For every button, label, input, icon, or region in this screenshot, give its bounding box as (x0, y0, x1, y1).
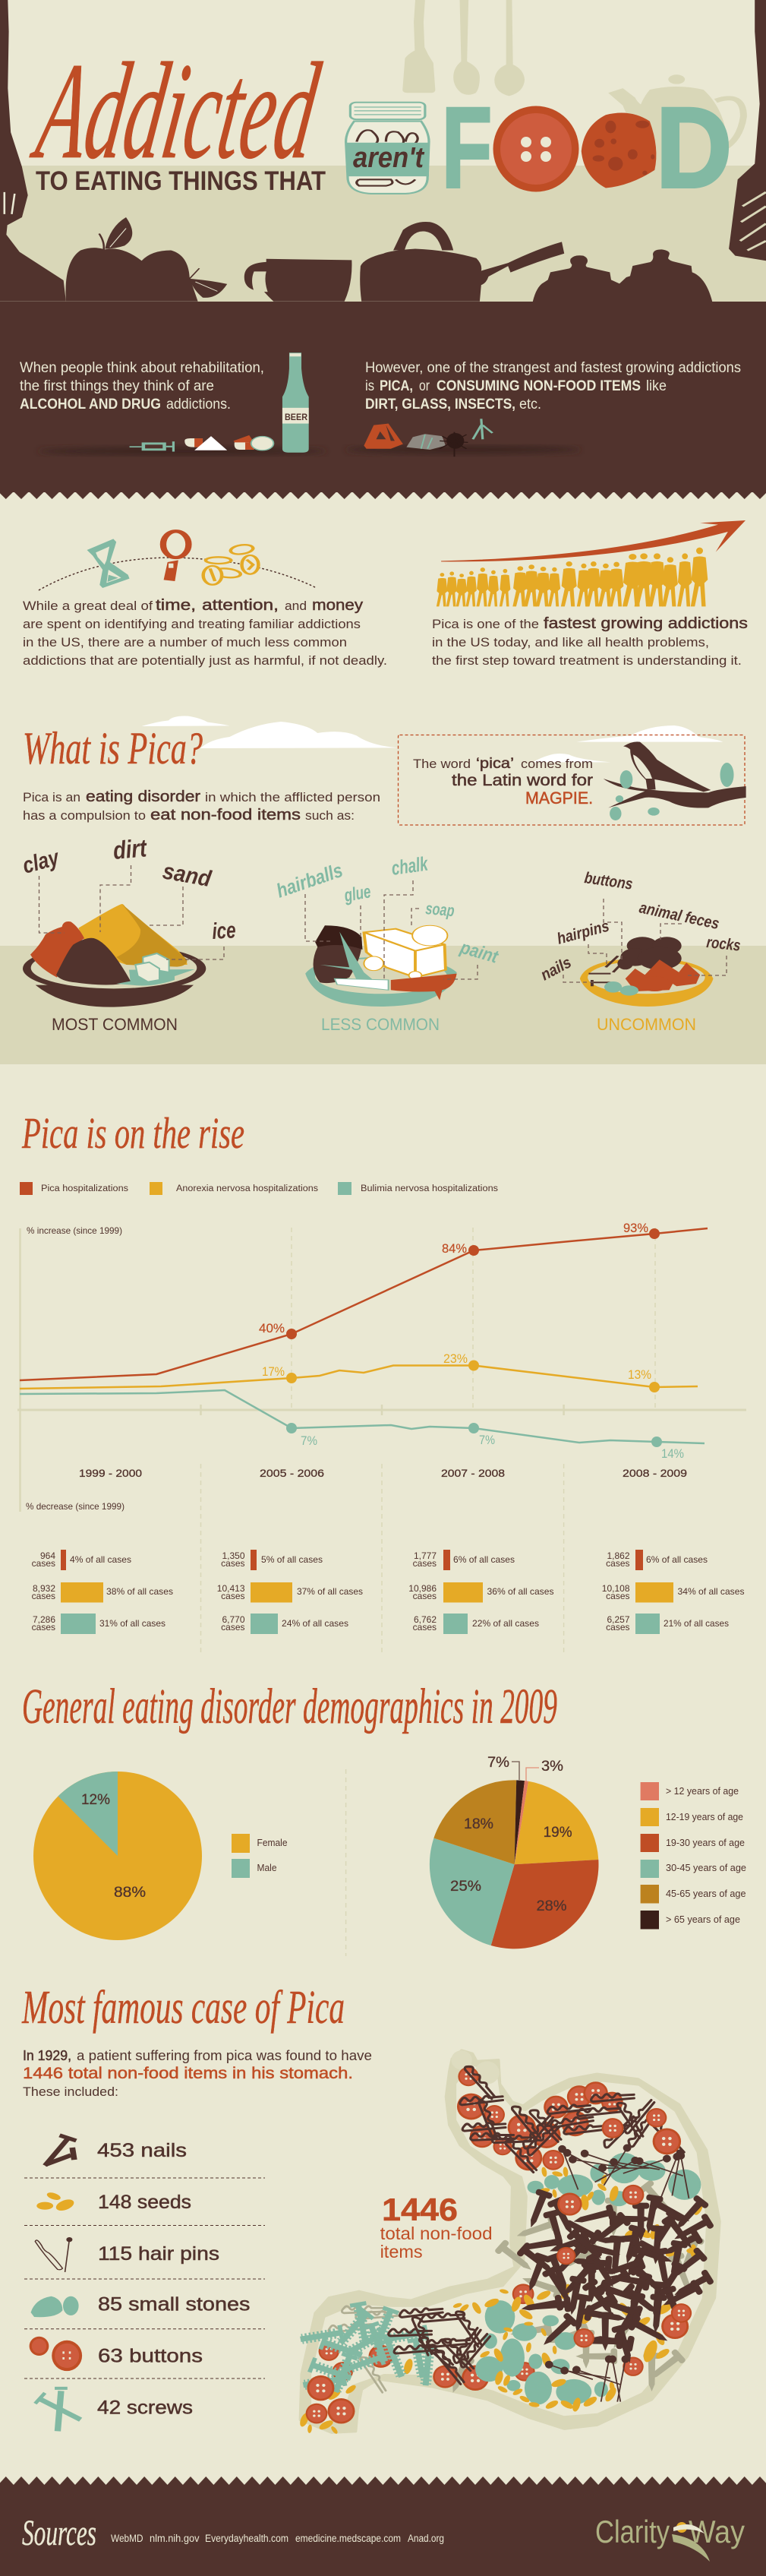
text: fastest growing (432, 615, 748, 668)
series: pica (20, 1221, 708, 1380)
text: however pica: DIRT, GLASS, INSECTS, (365, 397, 515, 412)
legend: gender: Male (257, 1863, 277, 1873)
list: items: 115 hair pins (98, 2243, 219, 2265)
clouds (142, 716, 723, 762)
series: pica: 84% (442, 1241, 467, 1256)
text: however pica: or (419, 378, 430, 394)
clay (30, 921, 84, 978)
text: fastest growing: Pica is one of the (432, 617, 539, 631)
pie chart: age: 3% (541, 1759, 563, 1775)
text: however pica (365, 360, 741, 412)
labels: uncommon (538, 869, 742, 984)
letter D: D (656, 84, 732, 211)
sand label: sand (161, 858, 213, 892)
text: case intro: a patient suffering from pica was found to have (77, 2048, 372, 2063)
legend (20, 1182, 498, 1195)
list: items: 85 small stones (98, 2294, 251, 2315)
category captions: LESS COMMON (321, 1015, 440, 1034)
callout text: The word (413, 757, 471, 771)
glue label: glue (342, 881, 373, 906)
panel: demographics (22, 1679, 746, 1956)
series: anorexia: 13% (628, 1367, 651, 1382)
heading: What is Pica? (23, 723, 203, 773)
list: items: 42 screws (97, 2397, 193, 2419)
sugar bowls (533, 249, 712, 302)
line chart (17, 1221, 746, 1656)
legend: Pica hospitalizations (41, 1184, 128, 1193)
plate inside (588, 961, 705, 994)
paint (391, 974, 457, 1000)
bars: 2005-2006: 37% of all cases (297, 1586, 363, 1597)
bars: 2008-2009: 10,108 (602, 1583, 630, 1594)
dotted arc (39, 558, 317, 590)
rocks (626, 959, 700, 991)
icon: drugs and beer bottle (130, 352, 309, 453)
pie chart: age: 19% (544, 1825, 572, 1841)
leader lines (39, 865, 224, 959)
bars: 2005-2006 (217, 1550, 363, 1634)
series: pica: 40% (259, 1321, 285, 1335)
period labels: 2007 - 2008 (441, 1467, 505, 1479)
heading: Pica is on the rise (21, 1108, 244, 1158)
top buttons (542, 2108, 692, 2347)
stomach illustration (298, 2050, 720, 2435)
soap label: soap (425, 899, 456, 920)
text: case intro (23, 2048, 372, 2099)
faded items (328, 2050, 705, 2395)
icon: nails (45, 2135, 76, 2166)
sand (78, 904, 188, 965)
text: however pica: like (646, 378, 667, 394)
sources list (111, 2533, 444, 2544)
series: bulimia (20, 1390, 705, 1461)
text: rehabilitation: the first things they think of are (20, 378, 214, 394)
pie chart: age: 28% (536, 1898, 567, 1914)
bars: 2005-2006: 24% of all cases (282, 1618, 348, 1629)
text: fastest growing: in the US today, and like all health problems, (432, 635, 709, 650)
text: however pica: However, one of the strangest and fastest growing addictions (365, 360, 741, 376)
sources heading: Sources (22, 2513, 96, 2553)
bars: 1999-2000: 8,932 (33, 1583, 55, 1594)
legend: age: 19-30 years of age (666, 1838, 745, 1848)
text: however pica: etc. (519, 397, 541, 412)
icon: hair pins (35, 2238, 72, 2272)
bars: 2005-2006: 1,350 (222, 1550, 245, 1561)
sources list: emedicine.medscape.com (295, 2533, 401, 2544)
bars: 2005-2006: cases (221, 1558, 244, 1569)
plate inside (31, 947, 197, 988)
icon: hourglass (87, 539, 130, 588)
pie chart: gender: 12% (81, 1792, 110, 1808)
legend: age: > 12 years of age (666, 1786, 739, 1797)
table band (0, 946, 766, 1064)
callout: magpie (398, 735, 746, 825)
category captions (52, 1015, 696, 1034)
stones (604, 981, 638, 996)
bars: 2007-2008: 10,986 (408, 1583, 437, 1594)
divider (345, 1769, 347, 1956)
series: bulimia: 7% (301, 1433, 317, 1448)
screws (299, 2303, 437, 2394)
seeds (298, 2167, 705, 2435)
leader lines (563, 899, 727, 982)
category captions: UNCOMMON (597, 1015, 696, 1034)
legend: gender (232, 1834, 288, 1878)
bars: 1999-2000: 38% of all cases (106, 1586, 173, 1597)
feces (617, 937, 682, 970)
bars: 1999-2000: 7,286 (33, 1614, 55, 1625)
rocks label: rocks (705, 934, 742, 955)
hairpins label: hairpins (555, 917, 611, 948)
title: Addicted: Addicted (24, 34, 328, 188)
panel: intro on brown (0, 302, 766, 499)
panel: most famous case (21, 1982, 720, 2435)
icon: seeds (36, 2191, 77, 2213)
text: case intro: In 1929, (23, 2048, 71, 2063)
bars: 2008-2009: cases (606, 1622, 630, 1633)
plate rim (23, 944, 206, 1007)
callout: 1446 total: total non-food (380, 2224, 493, 2243)
legend: gender: Female (257, 1838, 288, 1848)
zigzag edge (0, 2476, 766, 2485)
beer label: BEER (285, 412, 307, 422)
text: fastest growing: fastest growing addictions (544, 615, 748, 632)
bars: 2005-2006: 6,770 (222, 1614, 245, 1625)
icon: magnifier (163, 531, 188, 581)
text: time attention money: and (285, 599, 307, 613)
bars: 2007-2008: cases (413, 1558, 437, 1569)
bars: 2007-2008: cases (413, 1591, 437, 1601)
panel: what is pica (0, 716, 766, 1064)
callout text (413, 756, 593, 808)
chalk label: chalk (390, 852, 430, 880)
legend: age: 45-65 years of age (666, 1889, 746, 1899)
callout text: the Latin word for (452, 772, 593, 789)
sources list: Anad.org (408, 2533, 444, 2544)
paint label: paint (458, 937, 501, 968)
ice label: ice (212, 918, 236, 944)
text: case intro: These included: (23, 2085, 118, 2099)
icons: list (30, 2135, 82, 2431)
bars: 1999-2000: cases (32, 1591, 55, 1601)
series: anorexia: 17% (262, 1364, 285, 1379)
left and right spatula silhouettes (0, 0, 766, 302)
dirt label: dirt (112, 833, 149, 864)
icon: jar with aren't label (346, 103, 429, 194)
icon: coins (203, 543, 258, 585)
text: however pica: PICA, (380, 378, 413, 394)
list: items: 453 nails (97, 2140, 187, 2161)
list: items (24, 2140, 265, 2419)
zigzag edge (0, 491, 766, 499)
plate: less common (305, 925, 457, 1007)
text: definition: in which the afflicted person (205, 790, 380, 804)
bars: 2007-2008: cases (413, 1622, 437, 1633)
arrow: rising (441, 520, 746, 561)
bars: 2005-2006: cases (221, 1622, 244, 1633)
icon: crowd silhouette (437, 548, 708, 606)
text: definition: has a compulsion to (23, 808, 146, 823)
dashed box (398, 735, 745, 825)
glue (320, 932, 376, 982)
clay label: clay (20, 845, 62, 879)
panel: pica is on the rise (17, 1108, 746, 1656)
legend: Bulimia nervosa hospitalizations (361, 1184, 498, 1193)
bars: 2007-2008: 6,762 (414, 1614, 437, 1625)
nails (516, 2189, 714, 2365)
callout text: comes from (521, 757, 593, 771)
ball pins (544, 2143, 693, 2402)
panel: header kitchen scene (0, 0, 766, 302)
sand shadow (116, 904, 188, 967)
text: rehabilitation: ALCOHOL AND DRUG (20, 397, 161, 412)
text: definition: such as: (305, 808, 355, 823)
text: case intro: 1446 total non-food items in his stomach. (23, 2065, 353, 2082)
bars: 2007-2008: 36% of all cases (487, 1586, 554, 1597)
period labels: 2008 - 2009 (623, 1467, 687, 1479)
callout: 1446 total: 1446 (382, 2192, 458, 2227)
stomach outline (300, 2050, 720, 2432)
sources list: Everydayhealth.com (205, 2533, 288, 2544)
water (116, 969, 195, 985)
text: however pica: is (365, 378, 374, 394)
foam (364, 925, 447, 979)
icon: jar with aren't label: aren't (353, 142, 424, 174)
buttons (319, 2067, 644, 2391)
series: anorexia: 23% (443, 1351, 468, 1366)
series: pica: 93% (623, 1221, 648, 1235)
icon: screws (35, 2388, 80, 2431)
text: time attention money: money (312, 597, 363, 614)
icon: rock, glass, spider, dragonfly (364, 419, 493, 457)
icon: magpie on branch (604, 741, 746, 820)
silhouettes: apple, mug, pot, bowls (65, 217, 564, 302)
logo: Clarity Way: Clarity (595, 2514, 670, 2549)
text: time attention money: time, (156, 597, 196, 614)
series: bulimia: 7% (479, 1433, 495, 1447)
legend: age (641, 1782, 746, 1930)
text: fastest growing: the first step toward treatment is understanding it. (432, 653, 742, 668)
nails (588, 956, 626, 986)
period labels: 2005 - 2006 (260, 1467, 324, 1479)
text: definition (23, 789, 380, 823)
panel: time attention money (23, 531, 387, 668)
text: definition: eat non-food items (150, 807, 301, 823)
buttons label: buttons (583, 869, 634, 893)
callout text: ‘pica’ (476, 756, 514, 772)
title: FOOD (442, 84, 732, 211)
ice cubes (135, 953, 169, 982)
series: bulimia: 14% (661, 1446, 684, 1461)
pie chart: age: 18% (464, 1816, 493, 1832)
text: time attention money: While a great deal of (23, 599, 153, 613)
bars: 2008-2009: 34% of all cases (677, 1586, 744, 1597)
brown background (0, 2485, 766, 2576)
cookie O (582, 113, 656, 188)
bars: 2008-2009 (602, 1550, 744, 1634)
bars: 2008-2009: 6% of all cases (646, 1554, 708, 1565)
callout: 1446 total: items (380, 2242, 423, 2262)
shadows (38, 445, 581, 456)
text: rehabilitation: When people think about rehabilitation, (20, 360, 264, 376)
bars: 2007-2008 (408, 1550, 554, 1634)
animal feces label: animal feces (638, 899, 720, 933)
text: time attention money (23, 597, 387, 668)
list: items: 148 seeds (98, 2192, 191, 2213)
text: rehabilitation: addictions. (166, 397, 231, 412)
bars: 2008-2009: 1,862 (607, 1550, 630, 1561)
decrease caption: % decrease (since 1999) (26, 1501, 125, 1512)
bars: 2005-2006: 5% of all cases (261, 1554, 323, 1565)
pie chart: age: 25% (450, 1879, 481, 1895)
bars: 2008-2009: cases (606, 1558, 630, 1569)
bars: 1999-2000: cases (32, 1558, 55, 1569)
bottom buttons (306, 2375, 355, 2424)
callout text: MAGPIE. (525, 789, 593, 808)
plate: uncommon (580, 937, 714, 1007)
list: items: 63 buttons (98, 2346, 203, 2367)
callout: 1446 total (380, 2192, 493, 2262)
bars: 2008-2009: 6,257 (607, 1614, 630, 1625)
soap (364, 929, 446, 978)
legend: age: 30-45 years of age (666, 1863, 746, 1873)
logo: Clarity Way: Way (689, 2514, 745, 2549)
series: anorexia (20, 1351, 698, 1392)
legend: Anorexia nervosa hospitalizations (176, 1184, 318, 1193)
pie chart: gender: 88% (114, 1885, 146, 1901)
brown background (0, 302, 766, 492)
panel: fastest growing (432, 520, 748, 668)
icon: buttons (30, 2337, 82, 2371)
bars: 2007-2008: 22% of all cases (472, 1618, 539, 1629)
button O (493, 106, 578, 191)
plate rim (580, 959, 714, 1007)
stomach inside (313, 2066, 705, 2423)
period labels (79, 1467, 687, 1479)
text: time attention money: attention, (202, 597, 279, 614)
utensils and teapot (402, 0, 743, 166)
labels: most common (20, 833, 236, 959)
logo: Clarity Way (595, 2514, 745, 2562)
sources list: WebMD (111, 2533, 143, 2544)
plate rim (305, 957, 457, 1007)
axes and gridlines (17, 1228, 746, 1656)
letter F: F (442, 84, 492, 211)
icon: stones (31, 2296, 79, 2317)
period labels: 1999 - 2000 (79, 1467, 142, 1479)
pie chart: age (430, 1755, 598, 1949)
sources list: nlm.nih.gov (150, 2533, 200, 2544)
hairballs label: hairballs (273, 858, 345, 902)
leader lines (305, 880, 478, 980)
legend: age: > 65 years of age (666, 1914, 740, 1925)
bars: 1999-2000: 4% of all cases (70, 1554, 131, 1565)
bars: 1999-2000: cases (32, 1622, 55, 1633)
bars: 2005-2006: 10,413 (217, 1583, 245, 1594)
bars: 1999-2000: 31% of all cases (99, 1618, 165, 1629)
text: however pica: CONSUMING NON-FOOD ITEMS (437, 378, 641, 394)
bars: 2008-2009: cases (606, 1591, 630, 1601)
heading: Most famous case of Pica (21, 1982, 345, 2034)
plate inside (315, 959, 447, 994)
stones (475, 2153, 701, 2404)
bars: 1999-2000: 964 (40, 1550, 55, 1561)
hair pins (389, 2064, 686, 2385)
text: definition: eating disorder (86, 789, 200, 805)
bars: 2008-2009: 21% of all cases (664, 1618, 729, 1629)
bars: 2005-2006: cases (221, 1591, 244, 1601)
bars: 2007-2008: 1,777 (414, 1550, 437, 1561)
legend: age: 12-19 years of age (666, 1812, 743, 1822)
hairball (314, 927, 362, 983)
dirt (56, 938, 131, 985)
labels: less common (273, 852, 501, 980)
pie chart: age: 7% (487, 1755, 509, 1771)
pie chart: gender (33, 1772, 202, 1940)
panel: footer (0, 2476, 766, 2576)
plate: most common (23, 904, 206, 1007)
category captions: MOST COMMON (52, 1015, 178, 1034)
bars: 1999-2000 (32, 1550, 173, 1634)
text: time attention money: are spent on identifying and treating familiar addictions (23, 617, 361, 631)
text: time attention money: in the US, there are a number of much less common (23, 635, 347, 650)
text: rehabilitation (20, 360, 264, 412)
axis captions: % increase (since 1999) (27, 1225, 122, 1236)
text: definition: Pica is an (23, 790, 80, 804)
text: time attention money: addictions that are potentially just as harmful, if not deadly. (23, 653, 387, 668)
chalk (335, 978, 389, 990)
subtitle: TO EATING THINGS THAT (36, 166, 326, 196)
bars: 2007-2008: 6% of all cases (453, 1554, 515, 1565)
counter band (0, 166, 766, 302)
nails label: nails (538, 953, 574, 984)
